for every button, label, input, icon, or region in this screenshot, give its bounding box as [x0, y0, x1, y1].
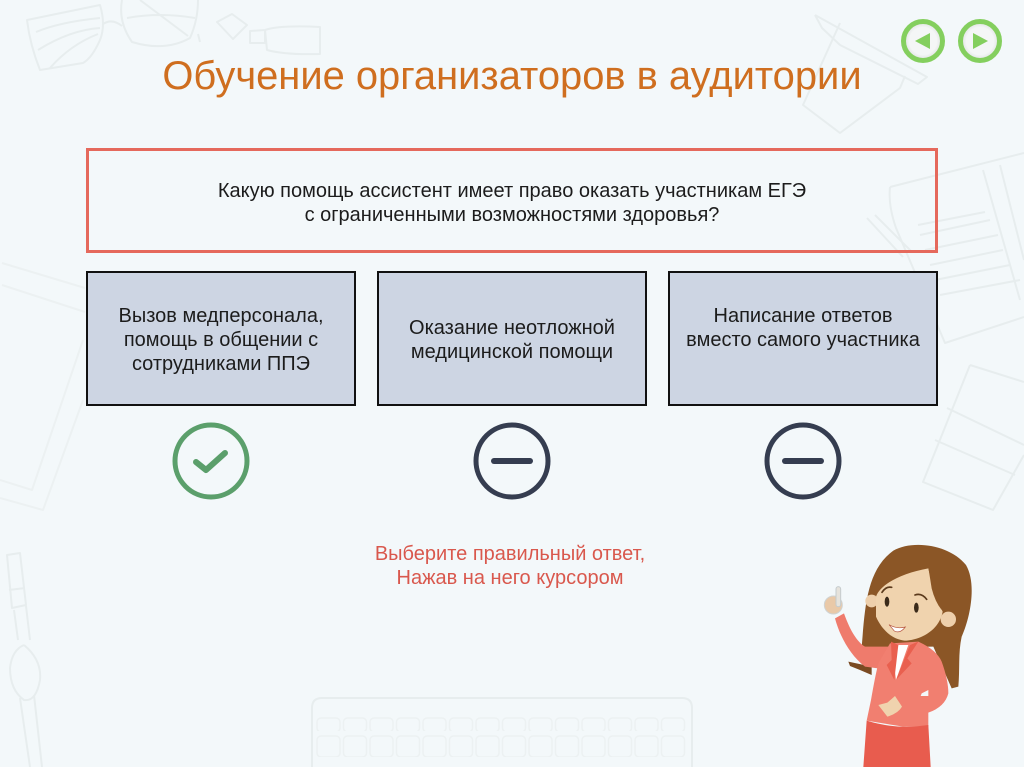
- answer option 2: Оказание неотложной: [409, 316, 615, 338]
- icon: wrong minus 2: [764, 422, 842, 500]
- instruction text: [375, 543, 645, 589]
- answer option 2: [377, 271, 647, 406]
- answer option 1: Вызов медперсонала,: [118, 304, 324, 326]
- answer option 3: вместо самого участника: [686, 328, 920, 350]
- answer option 1: [86, 271, 356, 406]
- instruction text: Выберите правильный ответ,: [375, 543, 645, 565]
- question box: с ограниченными возможностями здоровья?: [305, 204, 719, 226]
- illustration: teacher character: [824, 544, 972, 767]
- icon: wrong minus 1: [474, 422, 550, 500]
- instruction text: Нажав на него курсором: [397, 567, 623, 589]
- answer option 3: [668, 271, 938, 406]
- title: Обучение организаторов в аудитории: [162, 54, 862, 98]
- answer option 3: Написание ответов: [714, 304, 892, 326]
- navigation button: next: [958, 19, 1002, 63]
- question box: [86, 148, 938, 253]
- icon: correct check: [172, 422, 250, 500]
- question box: Какую помощь ассистент имеет право оказать участникам ЕГЭ: [218, 180, 806, 202]
- answer option 2: медицинской помощи: [411, 340, 613, 362]
- answer option 1: сотрудниками ППЭ: [132, 352, 310, 374]
- answer option 1: помощь в общении с: [124, 328, 318, 350]
- navigation button: previous: [901, 19, 945, 63]
